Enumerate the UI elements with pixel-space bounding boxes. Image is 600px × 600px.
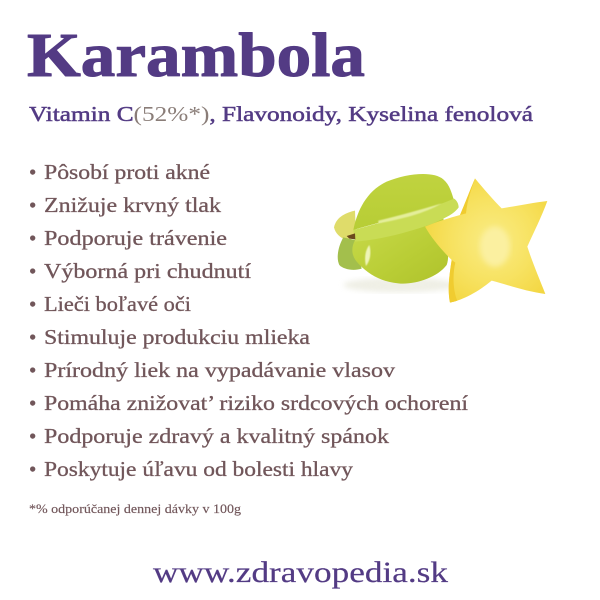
footnote: *% odporúčanej dennej dávky v 100g (29, 502, 242, 516)
fruit upper lobe (353, 174, 454, 230)
bullet 10: • (29, 457, 36, 481)
fruit lower lobe (352, 218, 448, 284)
star core highlight (480, 227, 510, 267)
stem (347, 233, 355, 239)
fruit highlights (378, 203, 442, 223)
fruit ridge (353, 199, 459, 242)
item 4: Výborná pri chudnutí (44, 259, 251, 283)
star slice (425, 178, 547, 303)
item 8: Pomáha znižovat’ riziko srdcových ochorení (44, 391, 468, 415)
bullet 4: • (29, 259, 36, 283)
back lobes (334, 211, 356, 239)
subtitle: nutrients: Vitamin C (52%*) , Flavonoidy, Kyselina fenolová (29, 102, 534, 126)
bullet 1: • (29, 160, 36, 184)
item 5: Lieči boľavé oči (44, 292, 191, 316)
item 10: Poskytuje úľavu od bolesti hlavy (44, 457, 354, 481)
bullet 5: • (29, 292, 36, 316)
bullet 8: • (29, 391, 36, 415)
shadow (343, 278, 457, 292)
bullet 7: • (29, 358, 36, 382)
website url: www.zdravopedia.sk (153, 556, 448, 589)
bullet 2: • (29, 193, 36, 217)
item 1: Pôsobí proti akné (44, 160, 210, 184)
item 3: Podporuje trávenie (44, 226, 227, 250)
image: star fruit (334, 174, 547, 303)
title: Karambola (27, 22, 365, 90)
item 9: Podporuje zdravý a kvalitný spánok (44, 424, 390, 448)
item 6: Stimuluje produkciu mlieka (44, 325, 311, 349)
bullet 9: • (29, 424, 36, 448)
item 2: Znižuje krvný tlak (44, 193, 222, 217)
bullet 3: • (29, 226, 36, 250)
list: benefits (29, 160, 468, 481)
star side (449, 178, 475, 303)
item 7: Prírodný liek na vypadávanie vlasov (44, 358, 396, 382)
bullet 6: • (29, 325, 36, 349)
